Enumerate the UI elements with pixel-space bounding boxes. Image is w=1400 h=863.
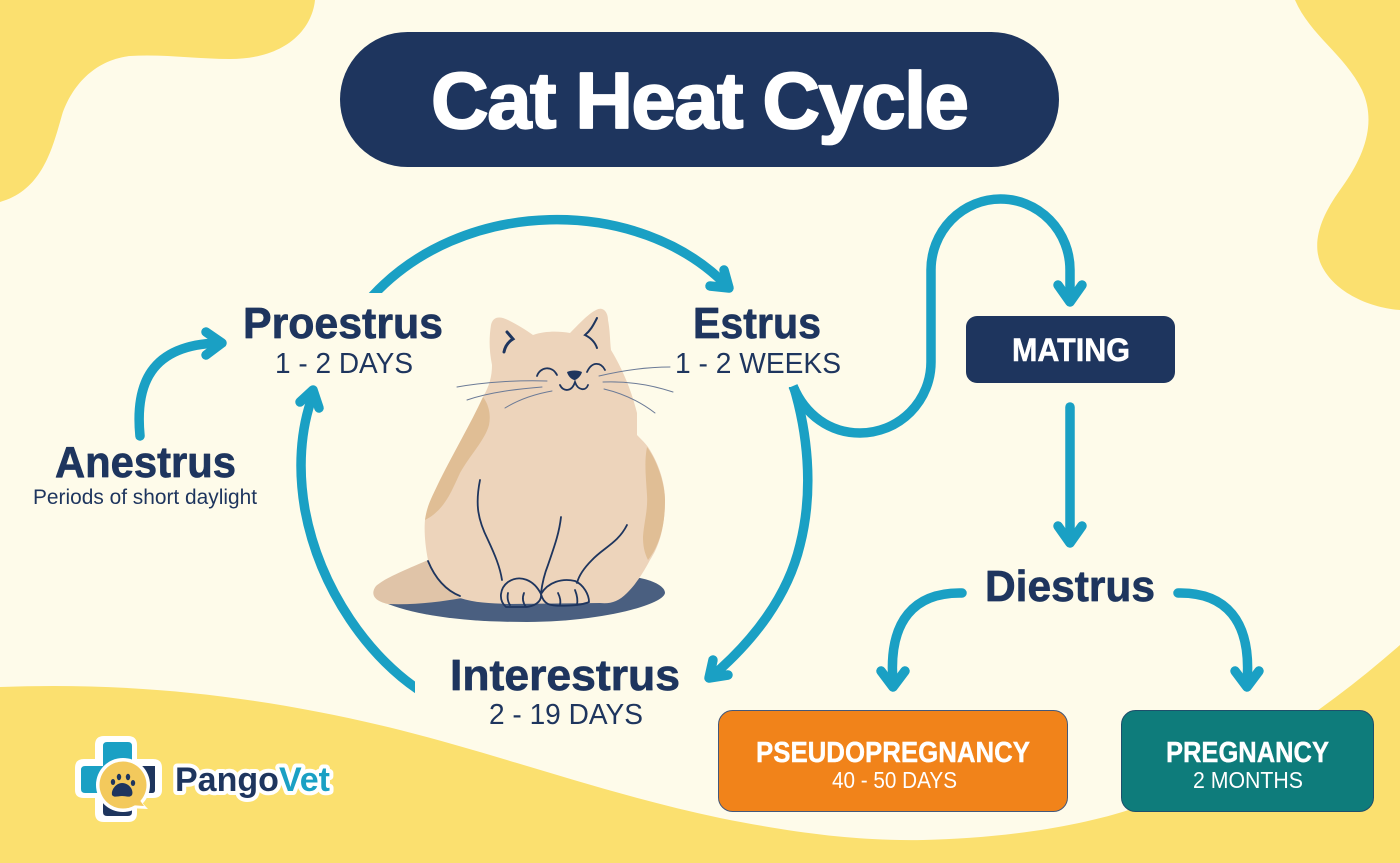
label: anestrus xyxy=(33,438,257,509)
box: pseudopregnancy xyxy=(718,710,1068,812)
label: proestrus xyxy=(243,299,443,380)
arrow: estrus to interestrus xyxy=(709,378,808,678)
cat: fur patches xyxy=(425,397,665,560)
box: mating xyxy=(966,316,1175,383)
box: pregnancy xyxy=(1122,710,1374,812)
box: mating: MATING xyxy=(1012,332,1130,368)
label: anestrus: Periods of short daylight xyxy=(33,486,257,509)
box: pseudopregnancy: 40 - 50 DAYS xyxy=(832,767,957,793)
logo: PangoVet xyxy=(75,736,330,822)
title xyxy=(340,32,1059,167)
label: diestrus: Diestrus xyxy=(985,562,1155,611)
box: pseudopregnancy: PSEUDOPREGNANCY xyxy=(756,737,1030,769)
cat: legs and tail lines xyxy=(428,480,627,596)
logo wordmark: PangoVet xyxy=(175,761,330,799)
label: estrus xyxy=(675,299,841,380)
box: pregnancy: 2 MONTHS xyxy=(1193,767,1303,793)
label: estrus: Estrus xyxy=(693,299,821,348)
title: Cat Heat Cycle xyxy=(431,56,969,145)
label: anestrus: Anestrus xyxy=(55,438,236,487)
label: estrus: 1 - 2 WEEKS xyxy=(675,348,841,380)
cat: ears and face xyxy=(504,318,605,390)
cat: whiskers xyxy=(457,367,673,413)
label: interestrus: 2 - 19 DAYS xyxy=(489,699,643,731)
arrow: estrus to mating xyxy=(793,199,1082,433)
arrow: proestrus to estrus xyxy=(368,220,729,301)
arrow: mating to diestrus xyxy=(1058,407,1082,543)
logo icon: medical cross with paw bubble xyxy=(75,736,162,822)
arrow: diestrus to pregnancy xyxy=(1178,593,1259,687)
cat: paws xyxy=(501,578,589,607)
arrow: interestrus to proestrus xyxy=(300,390,425,694)
label: proestrus: Proestrus xyxy=(243,299,443,348)
arrow: diestrus to pseudopregnancy xyxy=(881,593,962,687)
label: interestrus xyxy=(450,651,680,731)
box: pregnancy: PREGNANCY xyxy=(1166,737,1329,769)
arrow: anestrus to proestrus xyxy=(139,332,222,436)
label: proestrus: 1 - 2 DAYS xyxy=(275,348,413,380)
illustration: sitting cat xyxy=(373,309,673,622)
label: interestrus: Interestrus xyxy=(450,651,680,700)
